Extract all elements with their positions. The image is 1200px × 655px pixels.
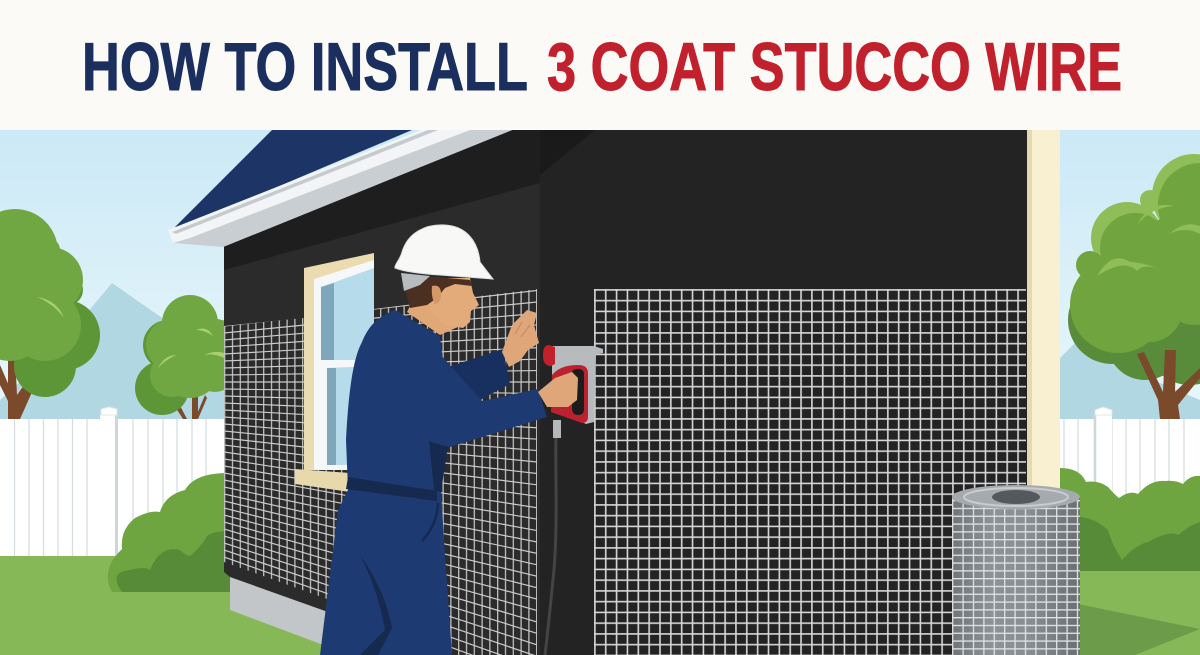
fence right (1060, 407, 1200, 519)
cream corner trim (1027, 130, 1060, 530)
mountain right (1060, 343, 1200, 420)
worker pocket line (422, 503, 438, 541)
worker belt (346, 477, 437, 501)
worker side shadow (427, 420, 450, 492)
house wall: side face (224, 130, 540, 655)
hard hat strap (401, 273, 430, 291)
bush right (1060, 468, 1200, 571)
lawn shadow (1078, 604, 1200, 655)
title: HOW TO INSTALL (82, 29, 528, 105)
worker raised hand (502, 310, 539, 367)
lawn (0, 556, 1200, 655)
worker hair (401, 274, 472, 308)
eave fascia and soffit (168, 130, 512, 247)
worker back arm (445, 349, 510, 400)
worker ear (432, 286, 441, 304)
worker (320, 225, 578, 655)
worker front hand (538, 372, 578, 407)
header band (0, 0, 1200, 130)
house wall: front face (540, 130, 1027, 655)
tree right (1068, 154, 1200, 419)
wire roll (952, 485, 1080, 655)
window (295, 253, 374, 492)
fence left (0, 407, 224, 556)
cord (545, 435, 556, 655)
title (82, 29, 1122, 105)
nail gun (543, 345, 603, 438)
mountain left (0, 283, 224, 420)
eave shadow band (224, 130, 540, 270)
house corner shadow (540, 130, 595, 175)
sky (0, 130, 1200, 430)
worker face (428, 278, 479, 328)
worker neck (407, 290, 462, 335)
bush left (108, 473, 232, 592)
foundation strip (230, 570, 400, 655)
hard hat (395, 225, 493, 279)
worker legs and torso (320, 310, 452, 655)
worker leg shadow (360, 555, 392, 655)
wire mesh: front wall (594, 289, 1026, 655)
roof (175, 130, 412, 228)
worker front arm (371, 336, 547, 447)
tree middle (135, 295, 224, 419)
tree left (0, 209, 100, 419)
wire mesh: side wall (224, 285, 540, 655)
